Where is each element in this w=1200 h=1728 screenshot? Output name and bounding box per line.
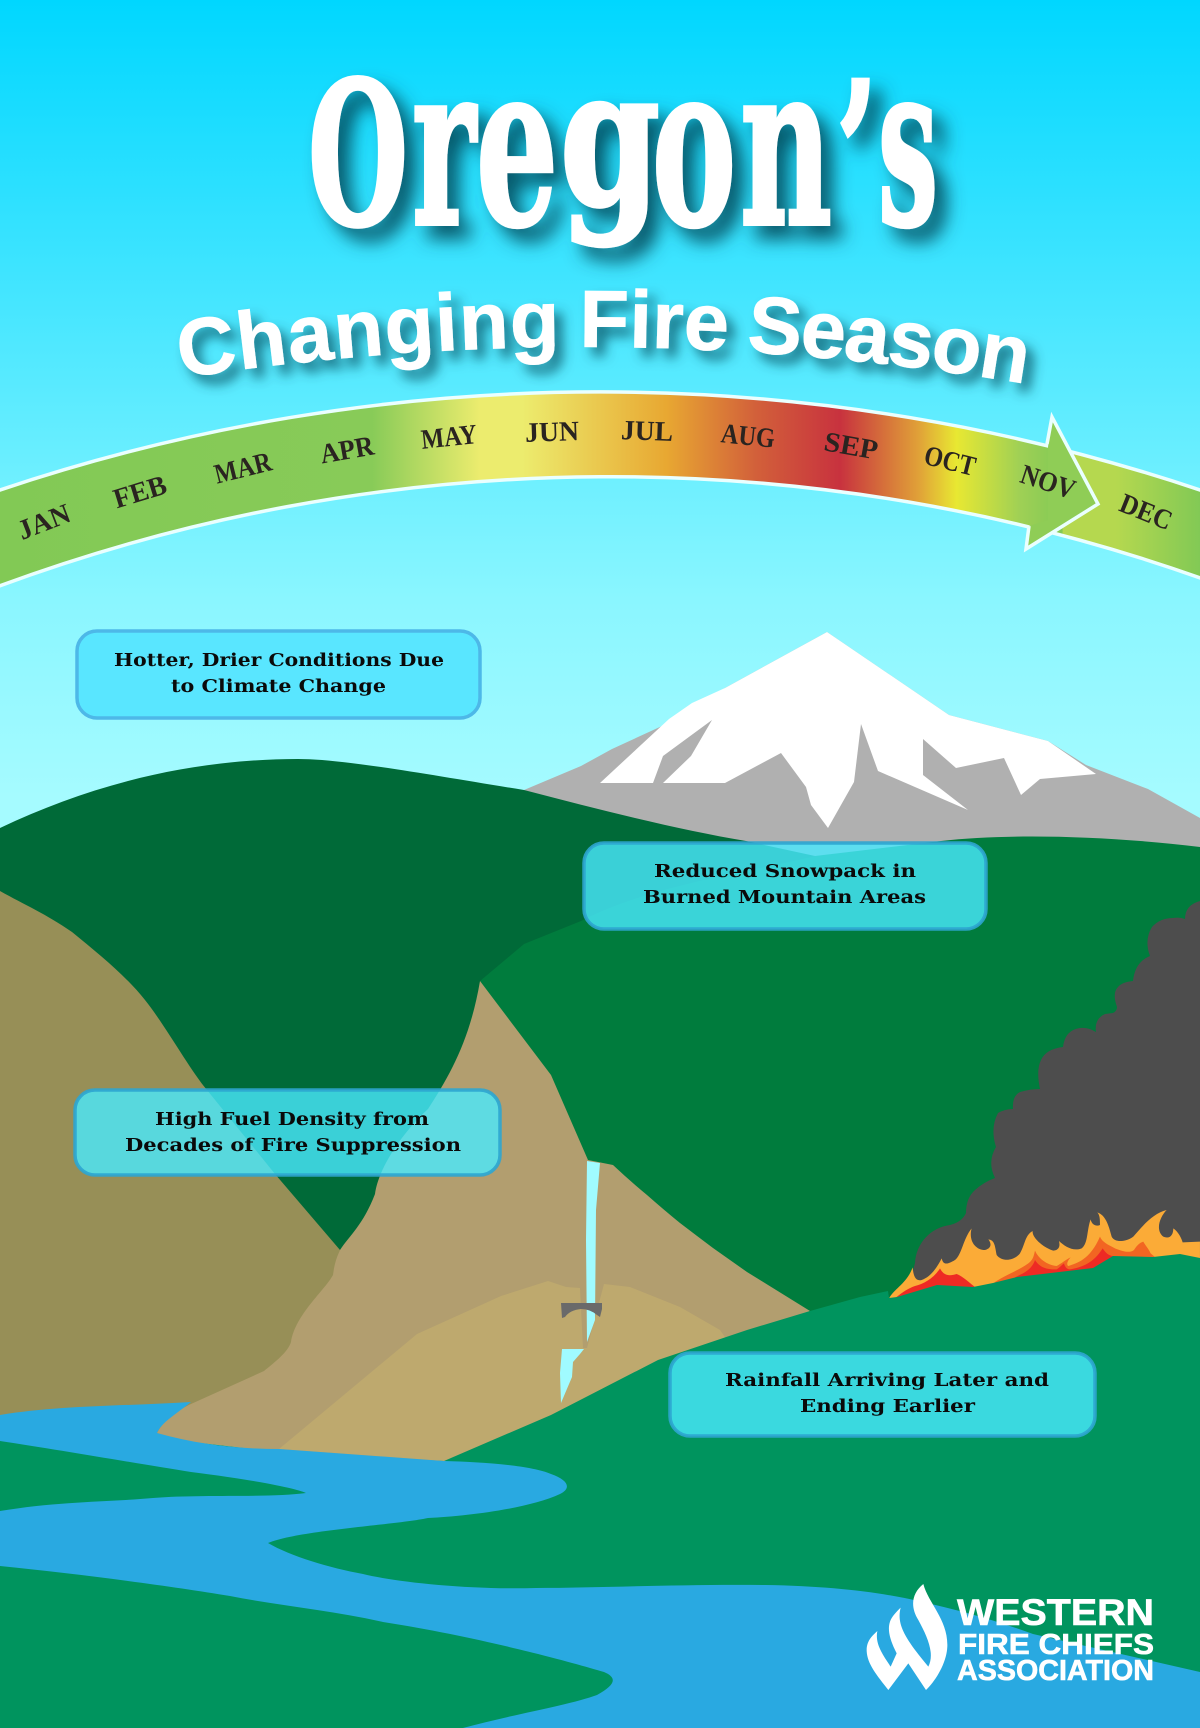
olive foothill <box>0 891 420 1440</box>
red flames right <box>1015 1248 1113 1287</box>
callout: climate change: to Climate Change <box>171 677 386 697</box>
dark green ridge <box>0 759 815 1300</box>
callout: fuel density <box>75 1090 500 1175</box>
lower falls <box>560 1349 584 1403</box>
callout: snowpack: Reduced Snowpack in <box>654 862 916 882</box>
month timeline arc <box>0 392 1200 588</box>
logo wordmark: WESTERN <box>957 1592 1154 1633</box>
month labels: JAN <box>13 498 75 547</box>
deep orange flames <box>993 1237 1158 1293</box>
title: Oregon's: g <box>560 26 660 249</box>
light tan cliff <box>279 1281 727 1461</box>
snow cap <box>600 632 1096 828</box>
callout: snowpack: Burned Mountain Areas <box>643 888 926 908</box>
month labels: MAR <box>211 446 276 491</box>
wildfire flames <box>889 1210 1200 1303</box>
month labels: JUL <box>620 415 674 448</box>
mountain <box>524 632 1200 900</box>
month labels: MAY <box>420 419 479 456</box>
arrow head <box>1026 418 1098 549</box>
title: Oregon's: o <box>652 14 736 278</box>
callout: rainfall: Ending Earlier <box>800 1397 976 1417</box>
logo: Western Fire Chiefs Association <box>867 1584 1154 1690</box>
month labels: FEB <box>110 470 170 515</box>
callout: rainfall: Rainfall Arriving Later and <box>725 1371 1049 1391</box>
subtitle: Changing Fire Season: Changing Fire Season <box>178 288 1042 400</box>
text: s <box>878 14 938 278</box>
river <box>0 1402 1200 1728</box>
icon: flame W <box>867 1584 947 1690</box>
month labels: JUN <box>524 416 580 449</box>
title: Oregon's: e <box>476 14 558 278</box>
month labels: NOV <box>1016 459 1079 506</box>
title: Oregon's <box>308 14 938 278</box>
month labels: SEP <box>822 427 880 466</box>
title: Oregon's: ’ <box>836 38 878 271</box>
icon: bridge <box>561 1303 602 1318</box>
callout: fuel density: Decades of Fire Suppression <box>125 1136 461 1156</box>
upper falls <box>586 1161 600 1342</box>
logo wordmark: ASSOCIATION <box>957 1655 1154 1687</box>
title: Oregon's: r <box>412 14 477 278</box>
mountain rock <box>524 632 1200 900</box>
waterfall <box>560 1161 600 1403</box>
gradient band <box>0 392 1200 588</box>
title: Oregon's: n <box>740 14 832 278</box>
callout: climate change: Hotter, Drier Conditions Due <box>114 651 444 671</box>
callout: climate change <box>77 631 480 718</box>
callout: rainfall <box>670 1353 1095 1436</box>
month labels: AUG <box>719 418 777 455</box>
logo wordmark <box>957 1592 1154 1687</box>
logo wordmark: FIRE CHIEFS <box>958 1629 1154 1661</box>
month labels: OCT <box>921 440 979 483</box>
month labels: APR <box>318 430 377 470</box>
mid green forest hill <box>480 836 1200 1400</box>
month labels: DEC <box>1115 488 1177 537</box>
smoke plume <box>905 901 1200 1300</box>
title: Oregon's: O <box>308 38 408 271</box>
month labels <box>13 415 1177 547</box>
arrow outline <box>1026 417 1098 549</box>
orange flames <box>889 1210 1200 1303</box>
red flames <box>893 1268 977 1300</box>
callout: snowpack <box>584 843 986 929</box>
callout: fuel density: High Fuel Density from <box>155 1110 430 1130</box>
tan canyon wall <box>157 981 810 1461</box>
front green hillside <box>0 1254 1200 1728</box>
